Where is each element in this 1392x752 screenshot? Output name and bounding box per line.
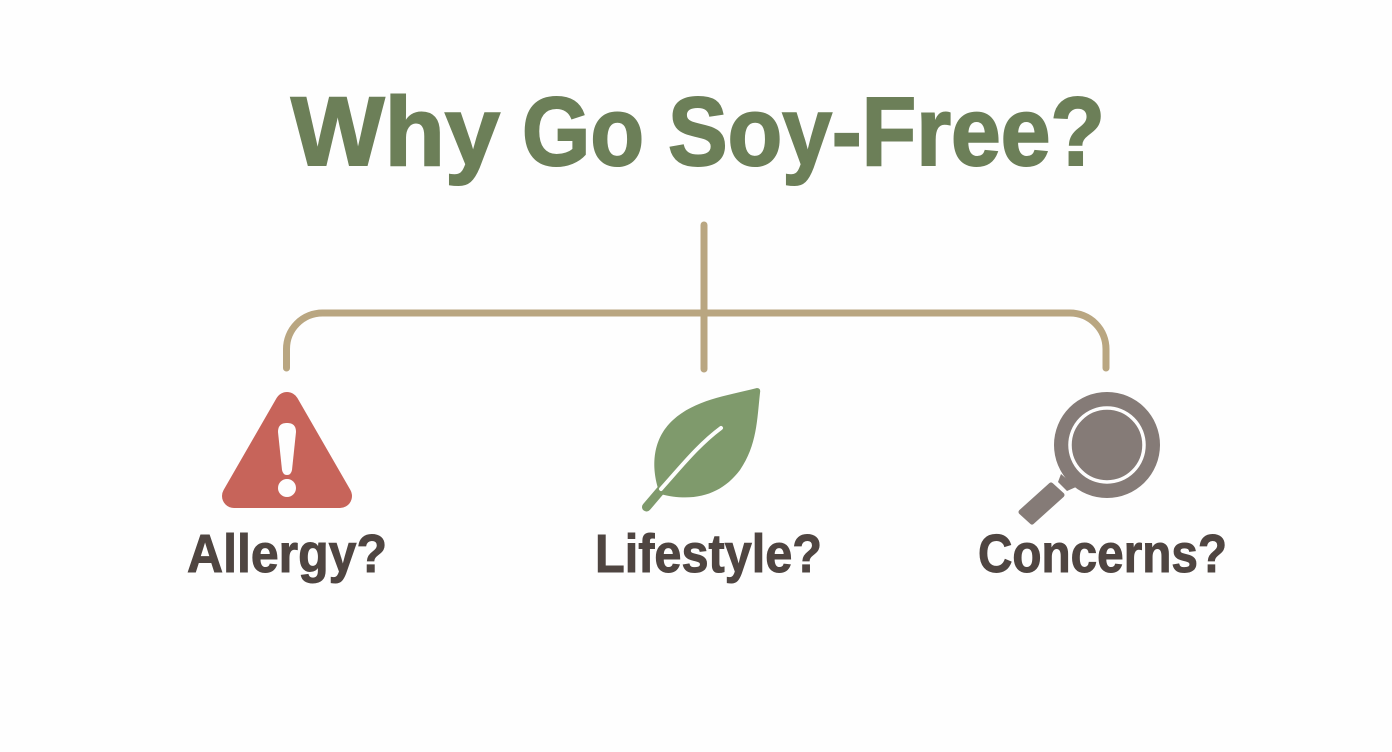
connector: tree lines	[286, 225, 1106, 369]
label: concerns: Concerns?	[978, 524, 1227, 584]
icon: magnifying glass	[1021, 392, 1160, 522]
icon: warning triangle	[234, 404, 340, 497]
label: lifestyle: Lifestyle?	[595, 524, 822, 584]
label: allergy: Allergy?	[187, 524, 387, 584]
icon: leaf	[646, 388, 760, 507]
title	[291, 77, 1105, 186]
title: Soy-Free?	[668, 77, 1105, 186]
title: Go	[522, 77, 644, 186]
title: Why	[291, 77, 500, 186]
